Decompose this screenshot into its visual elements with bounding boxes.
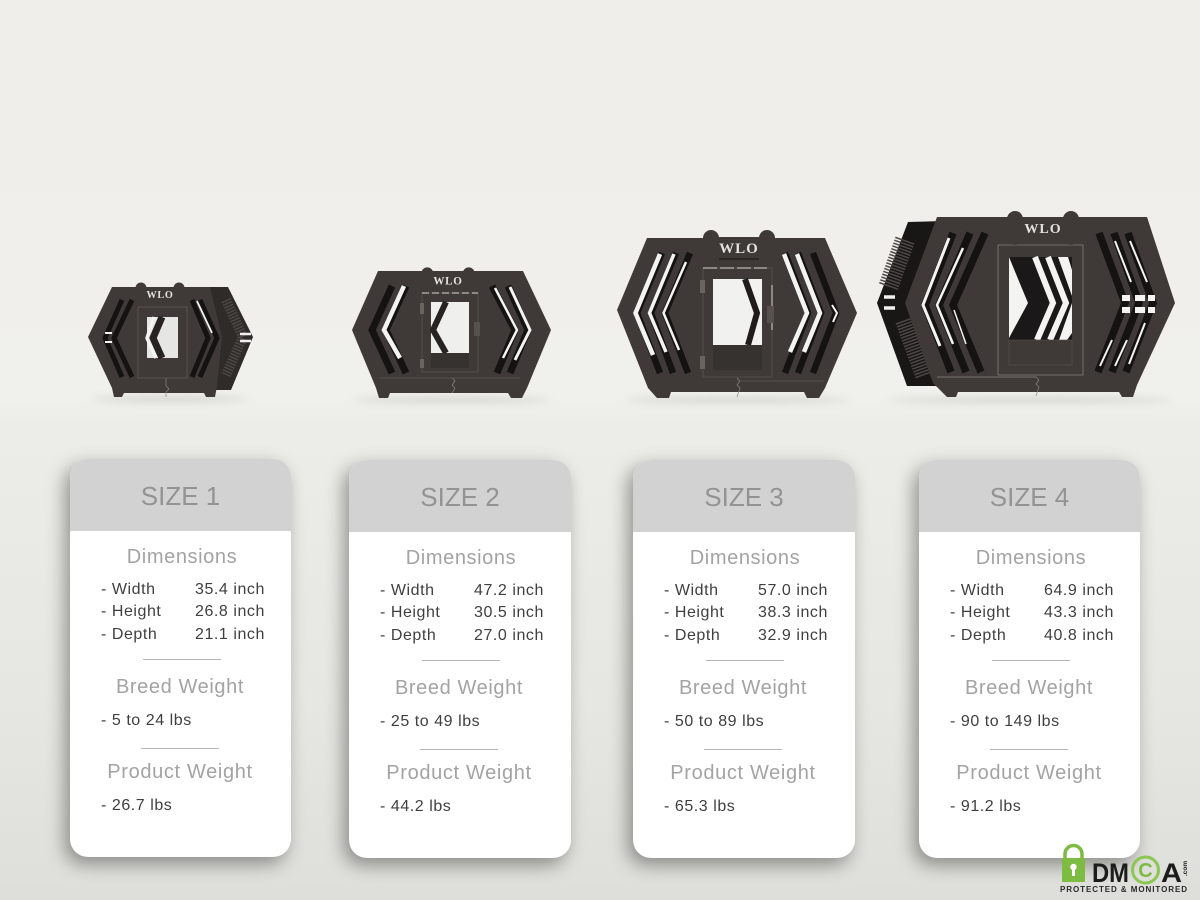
value: height: 30.5 inch (474, 604, 544, 621)
value: breed weight: - 90 to 149 lbs (950, 713, 1060, 730)
panel: size 3 (633, 460, 855, 858)
crate: size 3: WLO (719, 241, 759, 257)
text: height: - Height (380, 604, 440, 621)
text: height: - Height (950, 604, 1010, 621)
value: breed weight: - 5 to 24 lbs (101, 712, 192, 729)
heading: size 3: SIZE 3 (704, 482, 784, 512)
text: height: - Height (101, 603, 161, 620)
heading: size 1: SIZE 1 (141, 481, 220, 511)
heading: product weight: Product Weight (956, 762, 1102, 784)
heading: size 2 (349, 460, 571, 532)
heading: size 4 (919, 460, 1140, 532)
heading: breed weight: Breed Weight (116, 676, 244, 698)
value: height: 43.3 inch (1044, 604, 1114, 621)
value: width: 64.9 inch (1044, 582, 1114, 599)
text: depth: - Depth (101, 626, 157, 643)
value: depth: 21.1 inch (195, 626, 265, 643)
heading: size 1 (70, 459, 291, 531)
text: depth: - Depth (380, 627, 436, 644)
text: DMCA logotype: PROTECTED & MONITORED (1060, 885, 1187, 894)
text: DMCA logotype: A (1161, 858, 1182, 888)
text: height: - Height (664, 604, 724, 621)
crate: size 4 (877, 211, 1175, 402)
value: depth: 32.9 inch (758, 627, 828, 644)
text: width: - Width (664, 582, 719, 599)
text: depth: - Depth (664, 627, 720, 644)
text: DMCA logotype: C (1138, 860, 1153, 882)
crate: size 1: WLO (147, 290, 173, 301)
heading: breed weight: Breed Weight (395, 677, 523, 699)
panel: size 1 (70, 459, 291, 857)
value: product weight: - 44.2 lbs (380, 798, 451, 815)
value: product weight: - 91.2 lbs (950, 798, 1021, 815)
heading: dimensions: Dimensions (690, 547, 800, 569)
text: width: - Width (101, 581, 156, 598)
crate: size 4: WLO (1024, 222, 1062, 237)
value: breed weight: - 25 to 49 lbs (380, 713, 480, 730)
heading: breed weight: Breed Weight (679, 677, 807, 699)
text: depth: - Depth (950, 627, 1006, 644)
heading: dimensions: Dimensions (976, 547, 1086, 569)
value: width: 35.4 inch (195, 581, 265, 598)
icon: green padlock (1062, 846, 1085, 882)
text: DMCA logotype: DM (1092, 858, 1129, 888)
value: width: 57.0 inch (758, 582, 828, 599)
panel: size 4 (919, 460, 1140, 858)
heading: size 4: SIZE 4 (990, 482, 1069, 512)
heading: dimensions: Dimensions (127, 546, 237, 568)
value: depth: 27.0 inch (474, 627, 544, 644)
text: DMCA logotype (1060, 857, 1189, 894)
heading: size 2: SIZE 2 (420, 482, 500, 512)
text: DMCA logotype: .com (1182, 861, 1189, 876)
crate: size 1 (88, 282, 253, 401)
heading: size 3 (633, 460, 855, 532)
value: product weight: - 65.3 lbs (664, 798, 735, 815)
value: height: 26.8 inch (195, 603, 265, 620)
value: height: 38.3 inch (758, 604, 828, 621)
text: width: - Width (380, 582, 435, 599)
heading: product weight: Product Weight (386, 762, 532, 784)
crate: size 2: WLO (433, 275, 463, 287)
value: product weight: - 26.7 lbs (101, 797, 172, 814)
crate: size 2 (352, 267, 551, 402)
value: depth: 40.8 inch (1044, 627, 1114, 644)
heading: product weight: Product Weight (670, 762, 816, 784)
heading: breed weight: Breed Weight (965, 677, 1093, 699)
text: width: - Width (950, 582, 1005, 599)
value: width: 47.2 inch (474, 582, 544, 599)
heading: dimensions: Dimensions (406, 547, 516, 569)
panel: size 2 (349, 460, 571, 858)
value: breed weight: - 50 to 89 lbs (664, 713, 764, 730)
heading: product weight: Product Weight (107, 761, 253, 783)
crate: size 3 (617, 230, 857, 402)
